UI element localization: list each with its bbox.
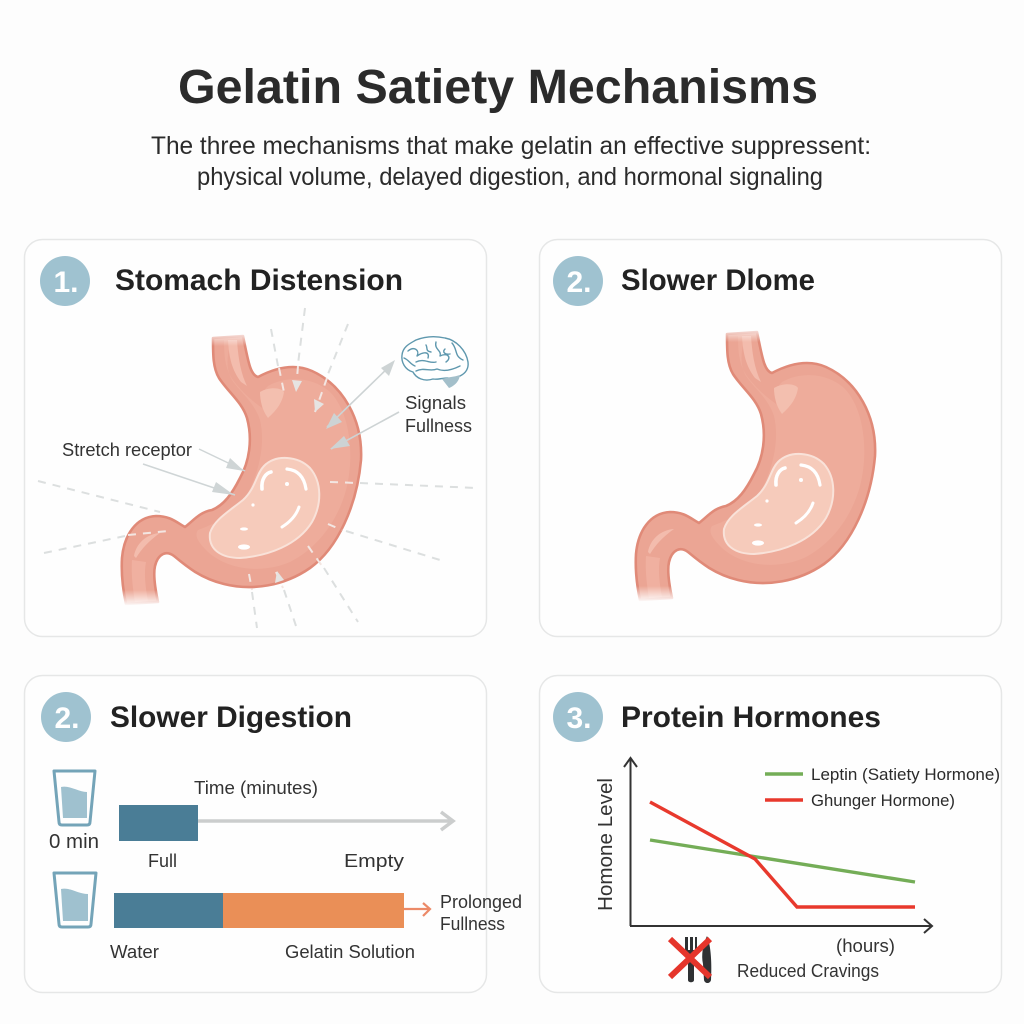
label: 0 min: 0 min [49, 831, 99, 853]
label: signals fullness: Signals [405, 393, 466, 413]
label: empty: Empty [344, 851, 404, 871]
panel: stomach distension [24, 240, 486, 636]
icon: water glass bottom [54, 873, 96, 927]
badge 2: 2. [54, 702, 80, 735]
label: signals fullness: Fullness [405, 416, 472, 436]
icon: water glass top [54, 771, 95, 825]
bar: water emptying [119, 805, 198, 841]
subtitle [151, 132, 871, 191]
subtitle: The three mechanisms that make gelatin an effective suppressent: [151, 132, 871, 160]
line: ghrelin [650, 802, 915, 907]
label: water: Water [110, 942, 159, 962]
arrow: prolonged [404, 903, 430, 916]
label: full: Full [148, 851, 177, 871]
arrows: signals fullness [326, 360, 399, 449]
subtitle: physical volume, delayed digestion, and hormonal signaling [197, 163, 823, 191]
label: time: Time (minutes) [194, 778, 318, 798]
stomach illustration [630, 326, 875, 602]
label: signals fullness [405, 393, 472, 436]
heading: stomach distension: Stomach Distension [115, 264, 403, 297]
icon: crossed-out cutlery [670, 936, 711, 983]
legend: Ghunger Hormone) [811, 791, 955, 810]
heading: slower digestion: Slower Digestion [110, 701, 352, 734]
label: gelatin solution: Gelatin Solution [285, 942, 415, 962]
heading: slower dlome: Slower Dlome [621, 264, 815, 297]
legend [765, 765, 1000, 810]
heading: protein hormones: Protein Hormones [621, 701, 881, 734]
bar: water segment [114, 893, 223, 928]
legend: Leptin (Satiety Hormone) [811, 765, 1000, 784]
badge 3 [553, 692, 603, 742]
badge 2 [41, 692, 91, 742]
panel: slower dlome [540, 240, 1002, 636]
label: stretch receptor: Stretch receptor [62, 440, 192, 460]
pressure arrowheads [275, 380, 324, 583]
badge 2 [553, 256, 603, 306]
label: reduced cravings: Reduced Cravings [737, 961, 879, 981]
badge 1: 1. [53, 266, 79, 299]
axes [624, 758, 932, 933]
title: Gelatin Satiety Mechanisms [178, 61, 818, 114]
label: prolonged fullness: Prolonged [440, 892, 522, 912]
arrow: time [198, 812, 453, 830]
label: prolonged fullness [440, 892, 522, 934]
line: leptin [650, 840, 915, 882]
badge 1 [40, 256, 90, 306]
arrows: stretch receptor [143, 449, 245, 495]
y axis label: Homone Level [595, 778, 617, 911]
badge 2: 2. [566, 266, 592, 299]
radial pressure lines [38, 308, 477, 628]
label: prolonged fullness: Fullness [440, 914, 505, 934]
line chart [595, 758, 932, 956]
stomach illustration [116, 330, 361, 606]
brain icon [402, 337, 468, 388]
x axis label: (hours) [836, 936, 895, 956]
panel: protein hormones [540, 676, 1002, 992]
badge 3: 3. [566, 702, 592, 735]
bar: gelatin segment [223, 893, 404, 928]
panel: slower digestion [24, 676, 522, 992]
